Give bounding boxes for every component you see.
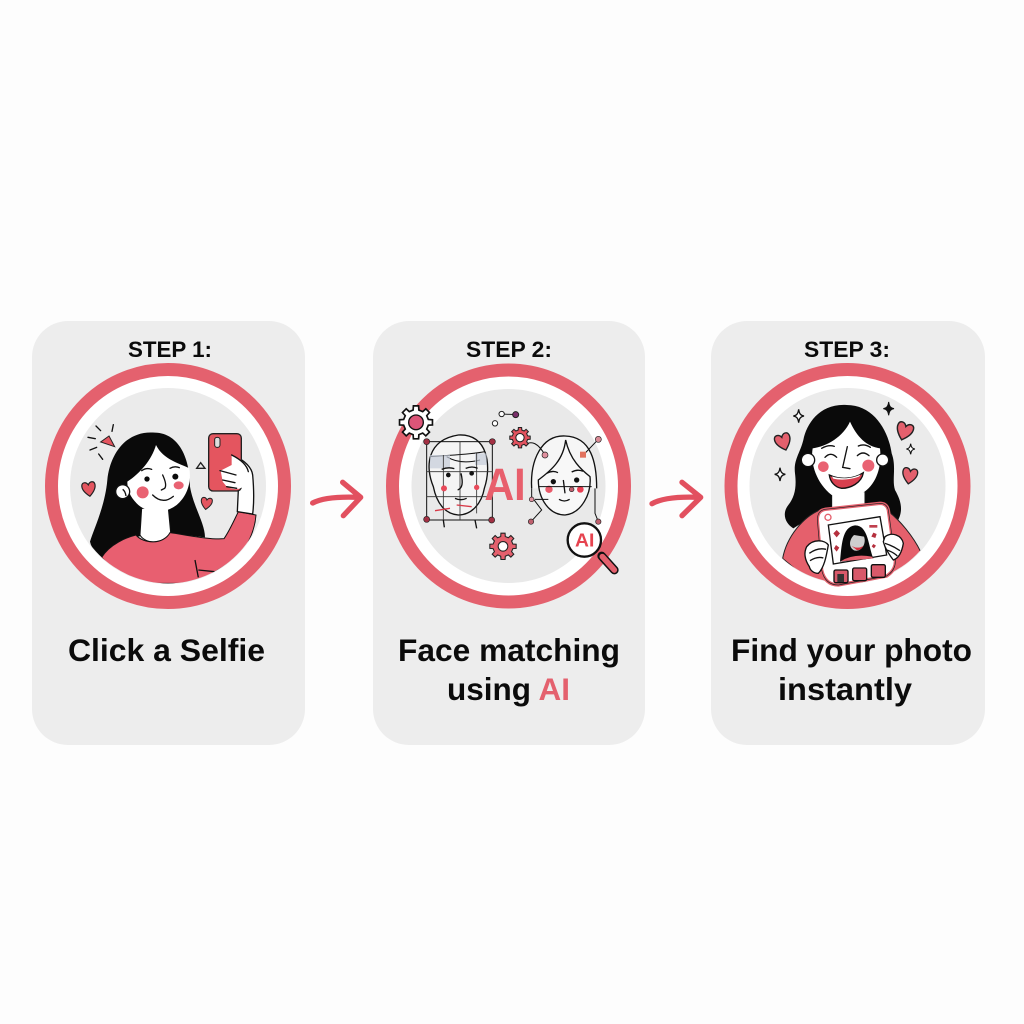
icon: hearts and sparkles: [773, 402, 918, 485]
icon: photo tablet: [805, 503, 903, 585]
icon: ai face matching: [400, 406, 614, 570]
ring: step 1: [52, 370, 284, 602]
panel: step 1: [32, 321, 305, 745]
caption: step 2: [398, 632, 620, 707]
arrow: step 2 to 3: [652, 482, 701, 516]
arrow: step 1 to 2: [313, 482, 361, 516]
icon: male face mesh: [427, 435, 492, 528]
caption: step 3: [731, 632, 972, 707]
heading: step 1: STEP 1:: [128, 337, 212, 362]
icon: red gear top: [510, 427, 530, 448]
caption: step 2: Face matching: [398, 632, 620, 668]
thumbnails: [834, 565, 885, 583]
mesh corner points: [424, 439, 495, 523]
ring: step 3: [731, 370, 964, 602]
icon: selfie girl: [81, 425, 256, 583]
face points: [528, 436, 601, 524]
icon: magnifier: [568, 523, 614, 570]
icon: nodes: [492, 411, 519, 426]
icon: happy girl with photo: [773, 402, 921, 585]
icon: female face: [525, 436, 598, 522]
panel: step 3: [711, 321, 985, 745]
panel: step 2: [373, 321, 645, 745]
caption: step 3: instantly: [778, 671, 912, 707]
icon: magnifier: AI: [575, 530, 594, 551]
caption: step 3: Find your photo: [731, 632, 972, 668]
icon: red gear bottom: [490, 533, 516, 560]
caption: step 1: Click a Selfie: [68, 632, 265, 668]
ring: step 2: [392, 370, 624, 602]
heading: step 2: STEP 2:: [466, 337, 552, 362]
label: central AI: AI: [484, 459, 526, 510]
icon: hearts and sparks: [81, 425, 213, 510]
icon: phone and hand: [209, 434, 254, 514]
heading: step 3: STEP 3:: [804, 337, 890, 362]
icon: gear on ring: [400, 406, 432, 439]
hands: [805, 534, 903, 573]
mouth: [829, 473, 863, 488]
caption: step 2: using AI: [447, 671, 570, 707]
